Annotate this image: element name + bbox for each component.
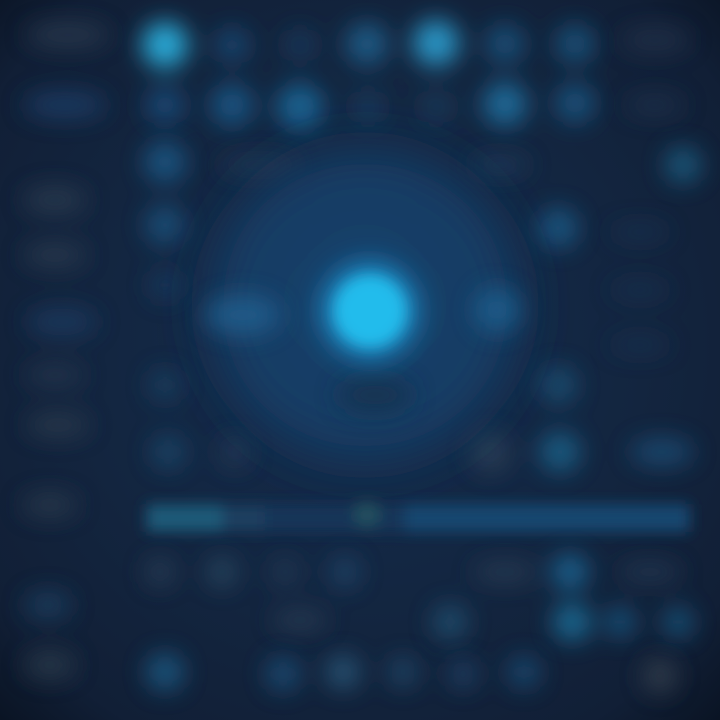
panel: right column	[610, 28, 690, 353]
central glowing core	[334, 275, 406, 347]
ring side nodes	[205, 295, 281, 335]
panel: left column	[22, 23, 110, 679]
progress bar	[145, 501, 690, 532]
panel: left icon column	[144, 141, 250, 469]
central glow halo	[320, 261, 420, 361]
panel: top icon grid	[142, 20, 595, 130]
chart: central ring	[205, 147, 523, 463]
ring dark lower area	[337, 377, 413, 413]
panel: right icon accents	[220, 147, 701, 472]
panel: lower data row	[146, 554, 693, 641]
panel: bottom icon row	[146, 653, 677, 693]
